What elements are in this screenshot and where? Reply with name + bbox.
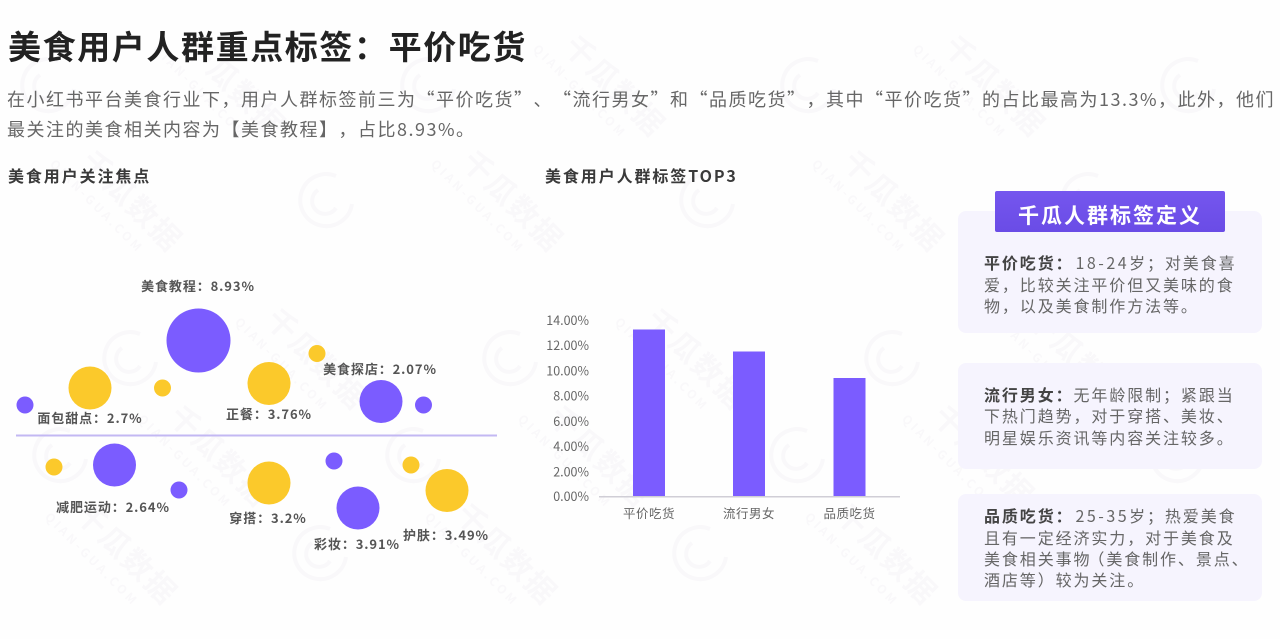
intro text: 最关注的美食相关内容为【美食教程】，占比8.93%。 [7,116,476,142]
panel: card 2: 下热门趋势，对于穿搭、美妆、 [984,403,1235,427]
label: 穿搭: 穿搭：3.2% [229,508,307,527]
bar chart: 8.00% [553,386,589,404]
label: 彩妆: 彩妆：3.91% [314,534,400,553]
label: 美食探店: 美食探店：2.07% [323,359,437,378]
header badge: 千瓜人群标签定义 [1018,200,1202,230]
panel: card 1 [958,211,1262,333]
bar chart [546,310,900,522]
panel: card 1: 爱，比较关注平价但又美味的食 [984,272,1235,296]
label: 美食教程: 美食教程：8.93% [141,276,255,295]
panel: card 3: 且有一定经济实力，对于美食及 [984,525,1235,549]
label: 正餐: 正餐：3.76% [226,404,312,423]
bar chart: 平价吃货 [623,503,675,522]
panel: card 1: 平价吃货：18-24岁；对美食喜 [984,250,1236,274]
bar chart: 4.00% [553,436,589,455]
bubble chart [16,276,497,553]
panel: card 2: 流行男女：无年龄限制；紧跟当 [984,382,1235,406]
label: 面包甜点: 面包甜点：2.7% [37,408,143,427]
bar chart: 12.00% [546,335,589,354]
label: 护肤: 护肤：3.49% [403,525,489,544]
header badge [995,191,1225,232]
intro text [7,86,1275,142]
label: 减肥运动: 减肥运动：2.64% [56,497,170,516]
bar chart: 品质吃货 [823,503,876,522]
panel: card 3: 美食相关事物（美食制作、景点、 [984,546,1250,570]
panel: card 3: 酒店等）较为关注。 [984,567,1145,591]
bar chart: 14.00% [546,310,589,329]
bar chart: 流行男女 [723,503,775,522]
panel: card 2 [958,363,1262,469]
bar chart: 2.00% [553,462,589,480]
heading: top3: 美食用户人群标签TOP3 [545,163,738,187]
panel: card 3 [958,494,1262,601]
bar chart: 0.00% [553,486,589,505]
panel: card 1: 物，以及美食制作方法等。 [984,293,1199,317]
panel: card 3: 品质吃货：25-35岁；热爱美食 [984,503,1236,527]
panel: card 2: 明星娱乐资讯等内容关注较多。 [984,425,1235,449]
bar chart: 6.00% [553,411,589,430]
bar chart: 10.00% [546,360,589,380]
title: 美食用户人群重点标签：平价吃货 [8,21,527,69]
heading: focus: 美食用户关注焦点 [8,163,151,187]
intro text: 在小红书平台美食行业下，用户人群标签前三为“平价吃货”、“流行男女”和“品质吃货”，其中“平价吃货”的占比最高为13.3%，此外，他们 [7,86,1275,112]
